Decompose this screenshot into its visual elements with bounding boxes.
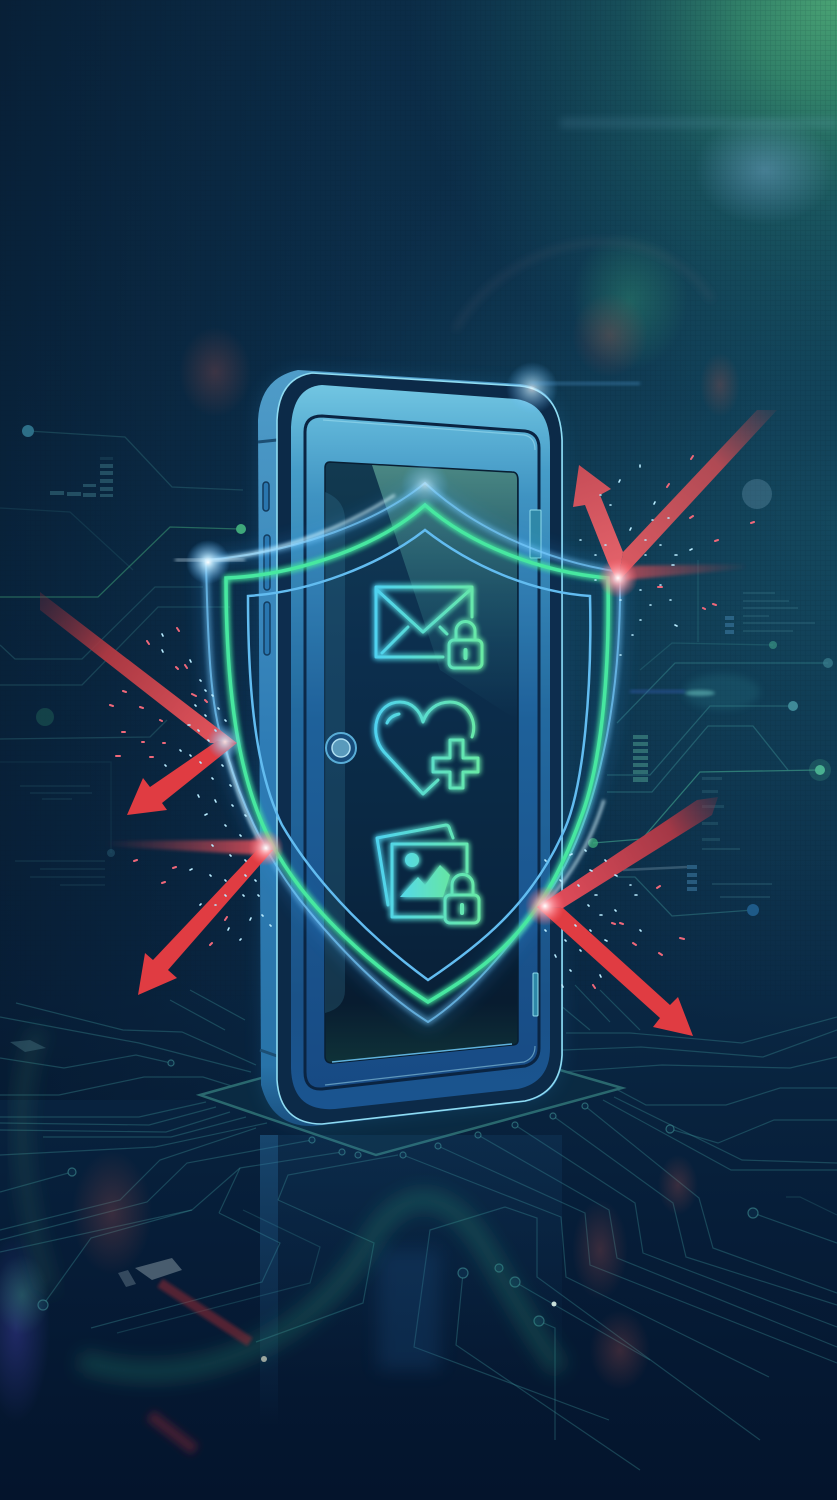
glass screen [325, 462, 518, 1063]
phone front dark band [277, 373, 562, 1124]
comet flare [630, 674, 760, 710]
outer frame [291, 385, 550, 1109]
shield inner line [248, 530, 590, 980]
icon: photos with lock [377, 825, 479, 923]
icon: envelope with lock [376, 587, 482, 668]
circuit board traces [0, 985, 837, 1470]
red arrow: top right [573, 410, 777, 582]
red arrow: right lower [537, 797, 718, 1036]
lens flares [179, 115, 837, 509]
microchip base [200, 1070, 622, 1155]
glass lower highlight [332, 1044, 512, 1062]
shield outer glow [206, 483, 620, 1022]
shield bright streaks [215, 495, 604, 905]
phone side band [258, 370, 563, 1126]
phone reflection [260, 1135, 562, 1425]
door knob [326, 733, 356, 763]
circuit traces: right [588, 560, 833, 916]
glass sheen [372, 465, 517, 720]
data bars: right [633, 592, 815, 898]
hinges [530, 510, 541, 1016]
side buttons [263, 482, 270, 655]
red arrow: left lower [105, 840, 273, 995]
glow bursts [175, 362, 640, 926]
shield outer line [206, 483, 620, 1022]
left glass strip [325, 492, 345, 1013]
shield green line [226, 505, 608, 1002]
data bars: left [15, 457, 113, 886]
inner frame [305, 416, 539, 1089]
shield [206, 483, 620, 1022]
circuit nodes [38, 1060, 758, 1326]
sparks: white-blue [162, 465, 692, 987]
shield tint [226, 505, 608, 1002]
red arrow: left upper [40, 592, 237, 815]
sparks: red [110, 456, 754, 988]
antenna lines [258, 440, 277, 1056]
circuit traces: left [0, 425, 246, 857]
icon: heart with plus [376, 702, 478, 794]
inner frame highlight [323, 420, 535, 1085]
reflected flares [0, 1030, 698, 1450]
phone glow [258, 370, 563, 1126]
phone [258, 370, 563, 1126]
